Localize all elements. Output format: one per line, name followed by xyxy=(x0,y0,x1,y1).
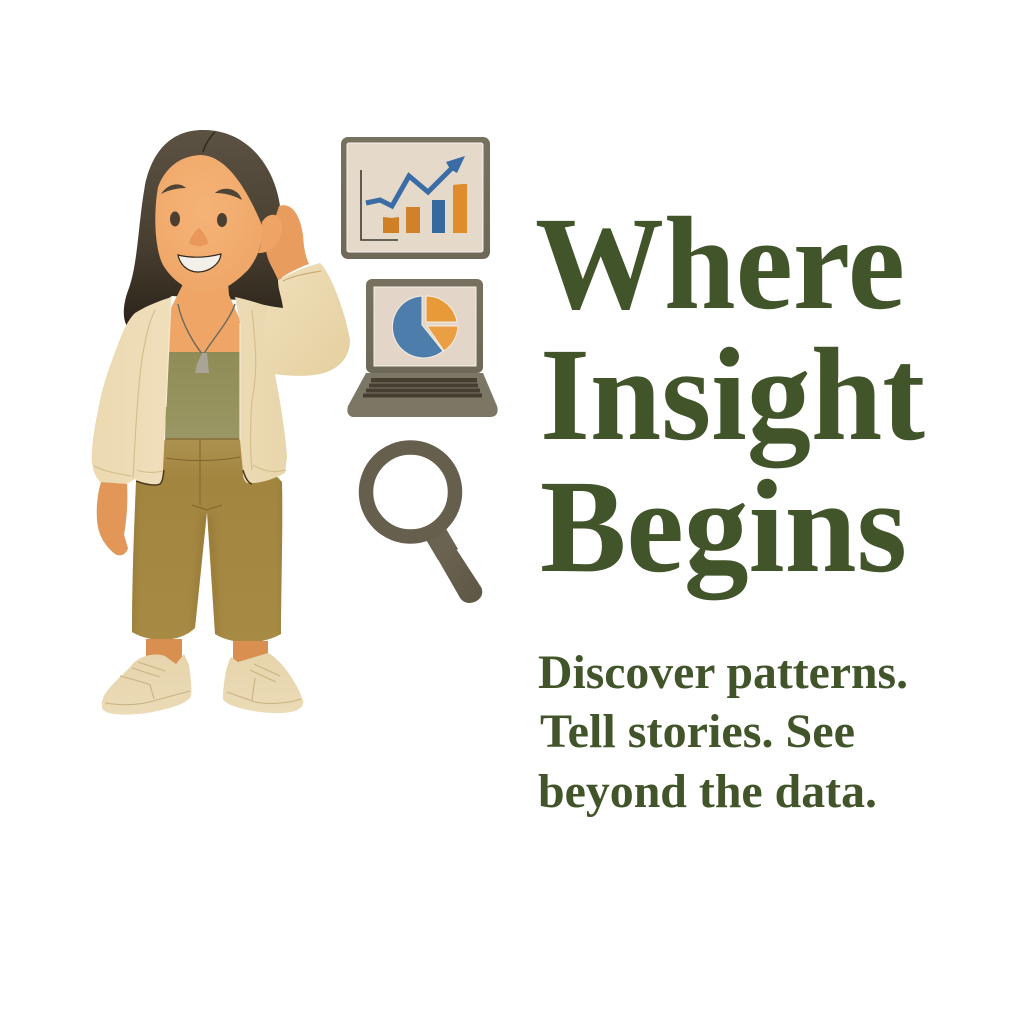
bars xyxy=(383,184,467,233)
necklace xyxy=(178,304,235,373)
icon: laptop with pie chart xyxy=(347,279,498,417)
tank top xyxy=(165,352,240,440)
pie chart xyxy=(392,296,458,358)
cardigan hem edge xyxy=(136,470,252,485)
lapel edge highlight xyxy=(166,300,240,440)
title: Insight xyxy=(540,320,925,468)
cardigan body xyxy=(92,297,287,485)
icon: magnifying glass xyxy=(366,448,482,603)
left hand xyxy=(97,482,128,555)
trouser shading xyxy=(131,480,284,640)
title: Where xyxy=(535,189,905,337)
title: Begins xyxy=(540,452,907,600)
nose xyxy=(189,228,208,246)
laptop base xyxy=(347,373,498,417)
hair part xyxy=(203,132,215,152)
tagline: beyond the data. xyxy=(538,765,877,818)
tagline: Tell stories. See xyxy=(540,705,855,758)
axes xyxy=(361,170,398,240)
hand behind head xyxy=(266,205,309,280)
face xyxy=(155,155,262,293)
trouser seams xyxy=(166,439,241,510)
trend line arrow xyxy=(366,156,465,206)
smile xyxy=(178,254,221,272)
hair back xyxy=(124,130,284,326)
ankles xyxy=(146,639,268,668)
infographic canvas xyxy=(92,130,924,817)
title xyxy=(535,189,925,600)
raised sleeve xyxy=(262,263,350,376)
eyes xyxy=(170,212,227,227)
right shoe xyxy=(223,653,303,713)
character: woman scratching her head xyxy=(92,130,350,715)
left shoe xyxy=(102,654,191,715)
tagline xyxy=(538,646,908,818)
tagline: Discover patterns. xyxy=(538,646,908,699)
cardigan details xyxy=(94,271,321,478)
neck and chest xyxy=(166,282,240,360)
trousers xyxy=(132,438,282,642)
ear xyxy=(258,215,282,253)
icon: chart board xyxy=(341,137,490,259)
eyebrows xyxy=(161,184,242,200)
keyboard xyxy=(363,378,482,398)
